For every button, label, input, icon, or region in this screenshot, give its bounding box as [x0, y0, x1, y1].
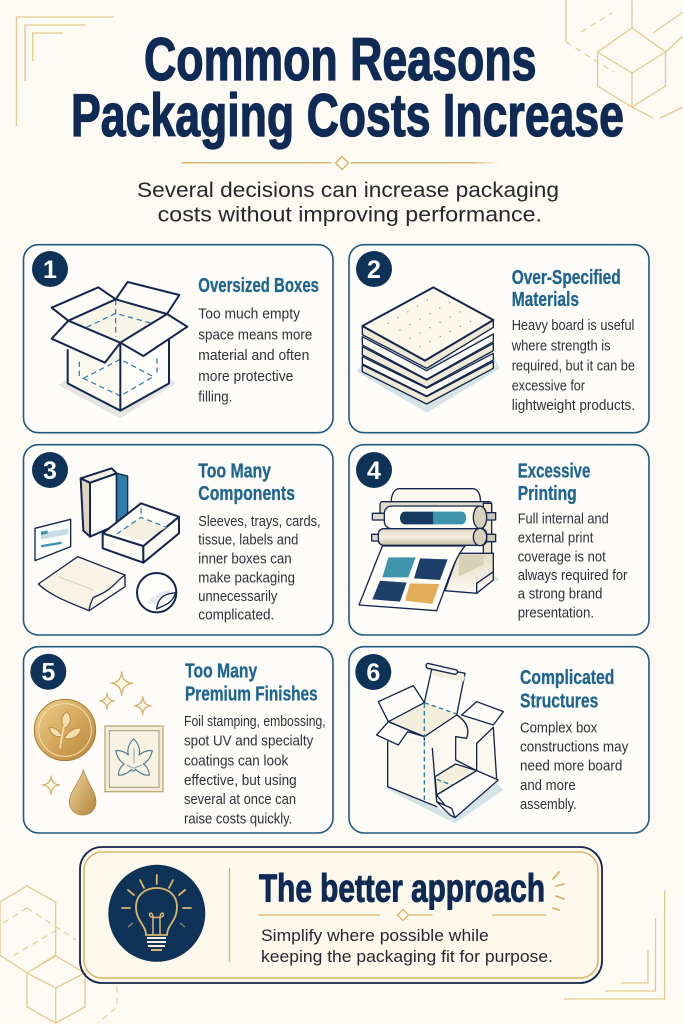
badge 6: 6 — [366, 659, 380, 687]
panel: excessive printing — [349, 445, 649, 635]
description: make packaging — [198, 570, 295, 587]
panel: oversized boxes — [24, 245, 333, 433]
heading — [198, 461, 295, 505]
icon: premium finishes — [34, 672, 163, 815]
description: complicated. — [198, 606, 274, 623]
badge 2: 2 — [367, 256, 381, 284]
badge 3: 3 — [43, 457, 57, 485]
badge 3 — [32, 452, 68, 488]
description: always required for — [518, 567, 627, 584]
icon: heading rays — [553, 872, 564, 910]
subtitle — [137, 178, 559, 227]
badge 5: 5 — [41, 659, 55, 687]
description — [198, 513, 321, 623]
title — [71, 26, 624, 149]
description — [198, 305, 312, 406]
conclusion text — [261, 926, 553, 966]
conclusion text: keeping the packaging fit for purpose. — [261, 947, 553, 966]
badge 1: 1 — [43, 256, 57, 284]
heading: Printing — [518, 483, 577, 505]
description — [511, 317, 635, 414]
panel: over-specified materials — [349, 245, 649, 433]
badge 2 — [356, 251, 392, 287]
description: Heavy board is useful — [512, 317, 634, 334]
badge 5 — [30, 654, 66, 690]
heading divider — [259, 910, 547, 920]
heading: Complicated — [520, 667, 614, 689]
panel: too many premium finishes — [24, 647, 333, 833]
description: Full internal and — [518, 510, 609, 527]
heading: Oversized Boxes — [198, 275, 319, 297]
panel: too many components — [24, 445, 333, 635]
description: effective, but using — [184, 772, 297, 789]
panel: complicated structures — [349, 647, 649, 833]
heading — [518, 461, 590, 505]
heading — [520, 667, 614, 712]
description: coverage is not — [518, 549, 606, 566]
description: where strength is — [511, 338, 611, 355]
decoration: bottom-right corner lines — [564, 890, 665, 999]
subtitle: costs without improving performance. — [158, 203, 542, 227]
badge 6 — [355, 654, 391, 690]
heading: Too Many — [198, 461, 272, 483]
icon: packaging components — [35, 468, 179, 612]
heading: the better approach: The better approach — [259, 868, 545, 911]
decoration: top-left corner lines — [16, 17, 114, 126]
description: Too much empty — [198, 305, 300, 322]
description: filling. — [198, 389, 232, 406]
description: spot UV and specialty — [184, 733, 314, 750]
icon: complicated box structure — [377, 663, 503, 823]
description: need more board — [520, 758, 622, 775]
description: several at once can — [184, 791, 296, 808]
description: coatings can look — [184, 752, 289, 769]
description: Complex box — [520, 720, 598, 737]
icon: gold drop — [69, 770, 96, 815]
description — [184, 713, 326, 827]
divider vertical — [228, 868, 230, 962]
heading: Structures — [520, 690, 598, 712]
heading: Excessive — [518, 461, 590, 483]
conclusion text: Simplify where possible while — [261, 926, 489, 945]
description: lightweight products. — [512, 397, 635, 414]
decoration: top-right cube outlines — [566, 0, 683, 118]
description — [518, 510, 627, 621]
description: constructions may — [520, 739, 629, 756]
heading: Over-Specified — [512, 267, 621, 289]
icon: stack of boards — [357, 287, 500, 413]
title divider with diamond — [182, 156, 501, 170]
icon: open box — [52, 282, 187, 418]
description: required, but it can be — [512, 358, 635, 375]
decoration: bottom-left hexagons — [0, 886, 117, 1023]
description: unnecessarily — [198, 588, 278, 605]
subtitle: Several decisions can increase packaging — [137, 178, 559, 202]
description: and more — [520, 777, 576, 794]
description: Sleeves, trays, cards, — [198, 513, 321, 530]
description: raise costs quickly. — [184, 810, 292, 827]
heading: Premium Finishes — [185, 684, 318, 706]
description: space means more — [198, 326, 312, 343]
description: a strong brand — [518, 586, 602, 603]
badge 4 — [356, 452, 392, 488]
description: external print — [518, 530, 594, 547]
heading: Too Many — [185, 661, 258, 683]
description: inner boxes can — [198, 550, 292, 567]
icon: sparkles — [42, 672, 151, 794]
description: tissue, labels and — [198, 532, 298, 549]
icon: embossed square — [105, 726, 163, 792]
heading — [185, 661, 318, 706]
heading — [512, 267, 621, 311]
badge 1 — [32, 251, 68, 287]
description: excessive for — [512, 378, 585, 395]
panel: the better approach — [80, 847, 602, 983]
description — [520, 720, 629, 813]
heading: Materials — [512, 289, 579, 311]
description: more protective — [198, 368, 293, 385]
badge 4: 4 — [367, 457, 381, 485]
icon: gold foil coin — [34, 699, 96, 761]
heading: Components — [198, 483, 295, 505]
description: presentation. — [518, 604, 594, 621]
description: assembly. — [520, 796, 577, 813]
description: material and often — [198, 347, 309, 364]
icon: printing press — [359, 489, 500, 611]
title: Common Reasons — [144, 26, 536, 93]
description: Foil stamping, embossing, — [184, 713, 326, 730]
icon: light bulb — [108, 865, 205, 962]
